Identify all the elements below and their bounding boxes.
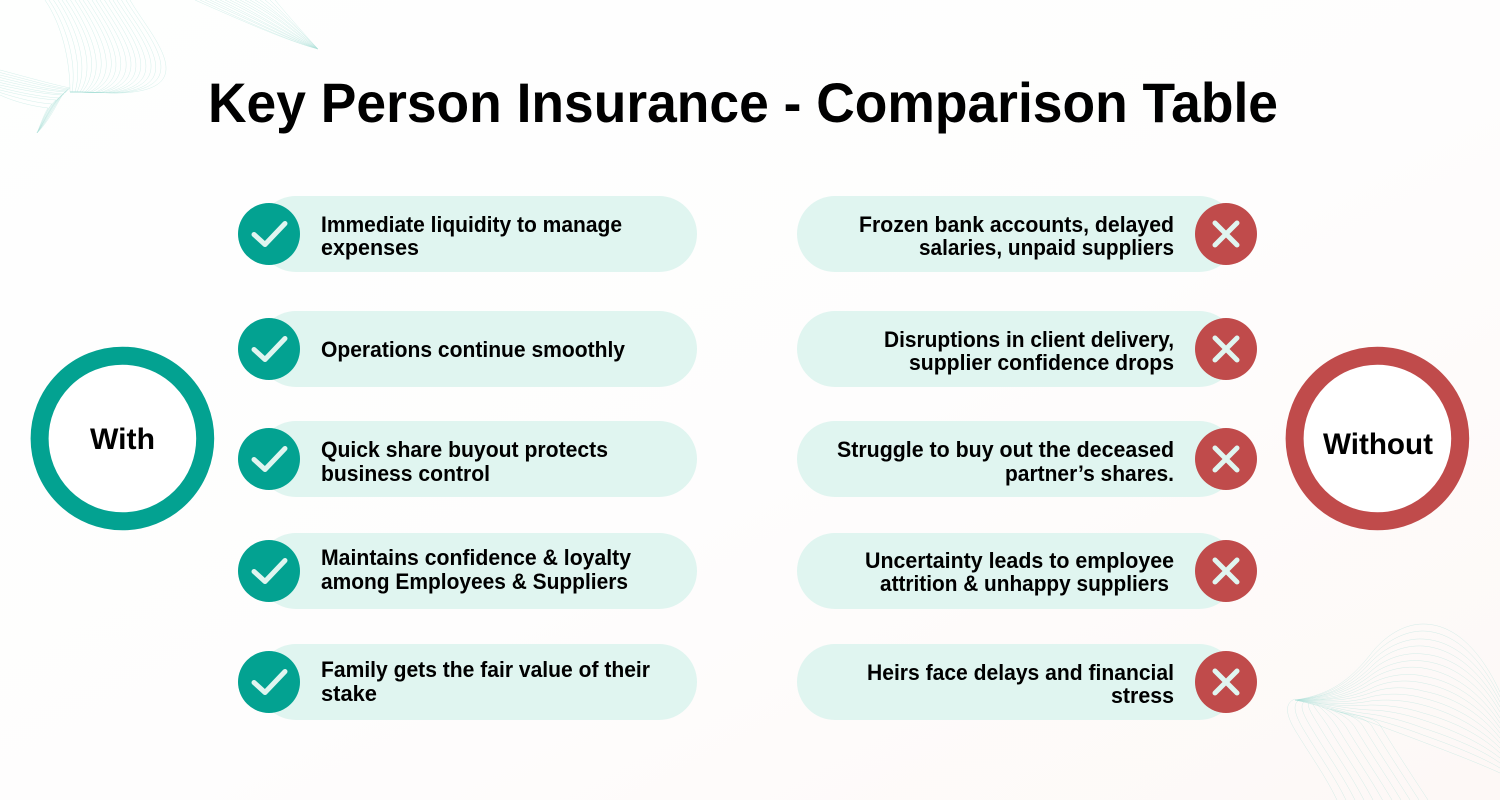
row 3 with: Quick share buyout protects <box>321 437 608 462</box>
row 5 without: stress <box>1111 683 1174 708</box>
row 5 without: Heirs face delays and financial <box>867 660 1174 685</box>
row 2 without: Disruptions in client delivery, <box>884 327 1174 352</box>
row 3 without <box>797 421 1257 497</box>
row 4 with: Maintains confidence & loyalty <box>321 545 632 570</box>
row 4 without <box>797 533 1257 609</box>
row 4 without: attrition & unhappy suppliers <box>880 571 1169 596</box>
badge: With: With <box>90 423 155 456</box>
row 5 with: Family gets the fair value of their <box>321 657 650 682</box>
badge: Without: Without <box>1323 428 1433 461</box>
decorative wave: bottom right <box>1287 624 1500 800</box>
row 4 without: Uncertainty leads to employee <box>865 548 1174 573</box>
row 5 with <box>238 644 697 720</box>
row 1 without: salaries, unpaid suppliers <box>919 235 1174 260</box>
row 3 with <box>238 421 697 497</box>
row 5 without <box>797 644 1257 720</box>
row 1 without <box>797 196 1257 272</box>
row 3 with: business control <box>321 461 490 486</box>
row 4 with <box>238 533 697 609</box>
row 3 without: partner’s shares. <box>1005 461 1174 486</box>
decorative wave: top left <box>0 0 166 133</box>
row 1 with: expenses <box>321 235 419 260</box>
title: Key Person Insurance - Comparison Table <box>208 71 1278 134</box>
row 2 with: Operations continue smoothly <box>321 337 626 362</box>
badge: With <box>40 356 205 521</box>
row 2 without: supplier confidence drops <box>909 350 1174 375</box>
decorative wave: top centre-left <box>195 0 318 49</box>
row 1 without: Frozen bank accounts, delayed <box>859 212 1174 237</box>
row 2 without <box>797 311 1257 387</box>
row 1 with <box>238 196 697 272</box>
row 4 with: among Employees & Suppliers <box>321 569 628 594</box>
row 2 with <box>238 311 697 387</box>
badge: Without <box>1295 356 1460 521</box>
row 5 with: stake <box>321 681 377 706</box>
row 3 without: Struggle to buy out the deceased <box>837 437 1174 462</box>
row 1 with: Immediate liquidity to manage <box>321 212 622 237</box>
